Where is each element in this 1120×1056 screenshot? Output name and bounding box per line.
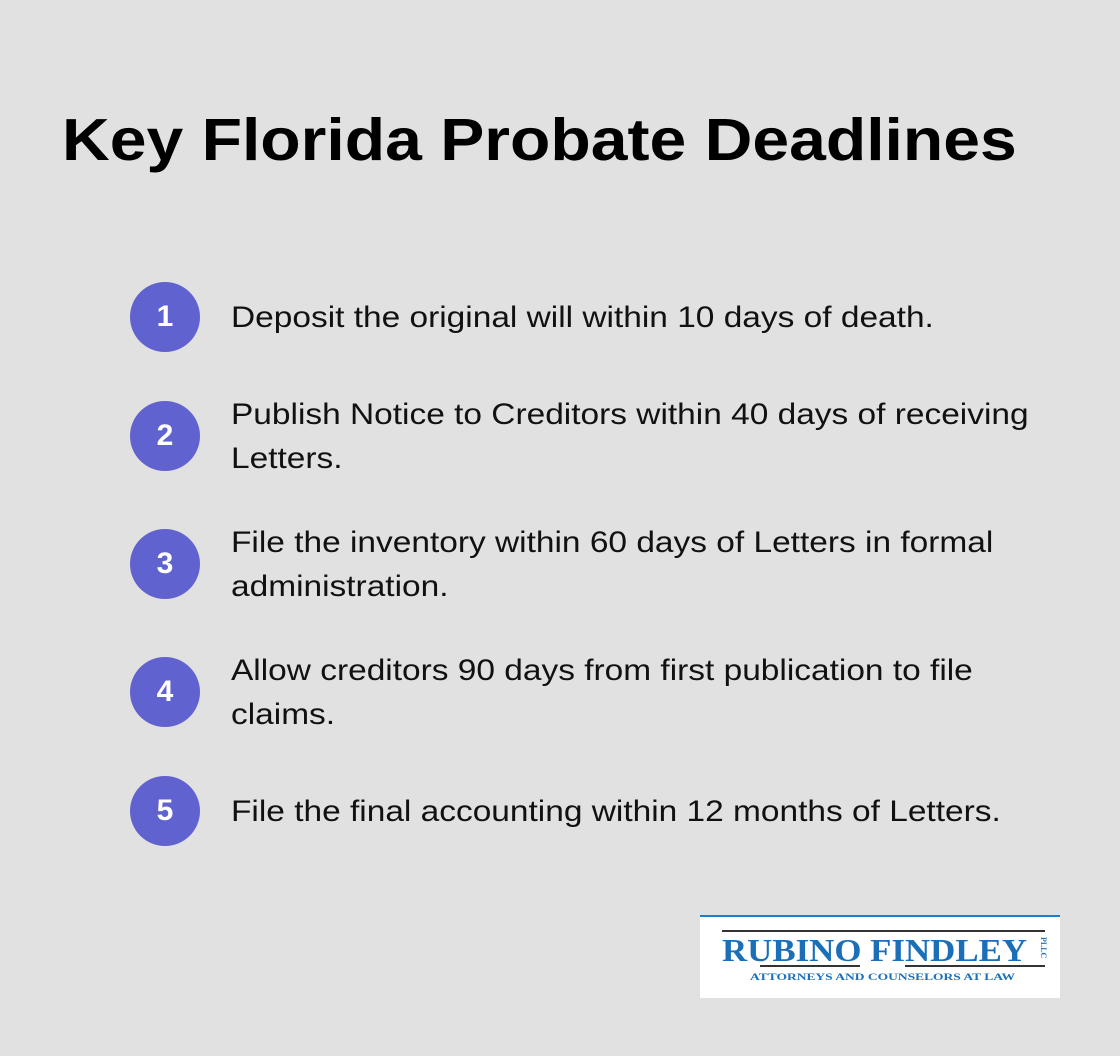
item 1 bbox=[130, 282, 934, 352]
circle 1: 1 bbox=[157, 300, 173, 333]
logo: RUBINO FINDLEY bbox=[722, 932, 1027, 968]
item 3 bbox=[130, 526, 993, 603]
circle 1 bbox=[130, 282, 200, 352]
item 2 bbox=[130, 398, 1029, 475]
circle 3: 3 bbox=[157, 547, 173, 580]
logo: PLLC bbox=[1039, 937, 1048, 959]
circle 5: 5 bbox=[157, 794, 173, 827]
text 3: File the inventory within 60 days of Letters in formal bbox=[231, 526, 993, 559]
title: Key Florida Probate Deadlines bbox=[62, 107, 1017, 173]
text 2: Letters. bbox=[231, 442, 343, 475]
text 4 bbox=[231, 654, 973, 731]
text 5: File the final accounting within 12 months of Letters. bbox=[231, 795, 1001, 828]
circle 2: 2 bbox=[157, 419, 173, 452]
text 2: Publish Notice to Creditors within 40 days of receiving bbox=[231, 398, 1029, 431]
logo bbox=[700, 915, 1060, 998]
text 4: claims. bbox=[231, 698, 335, 731]
circle 4 bbox=[130, 657, 200, 727]
text 3: administration. bbox=[231, 570, 449, 603]
text 2 bbox=[231, 398, 1029, 475]
item 5 bbox=[130, 776, 1001, 846]
item 4 bbox=[130, 654, 973, 731]
circle 4: 4 bbox=[157, 675, 173, 708]
text 3 bbox=[231, 526, 993, 603]
logo: ATTORNEYS AND COUNSELORS AT LAW bbox=[750, 972, 1015, 982]
text 4: Allow creditors 90 days from first publication to file bbox=[231, 654, 973, 687]
circle 5 bbox=[130, 776, 200, 846]
circle 2 bbox=[130, 401, 200, 471]
text 1: Deposit the original will within 10 days of death. bbox=[231, 301, 934, 334]
circle 3 bbox=[130, 529, 200, 599]
